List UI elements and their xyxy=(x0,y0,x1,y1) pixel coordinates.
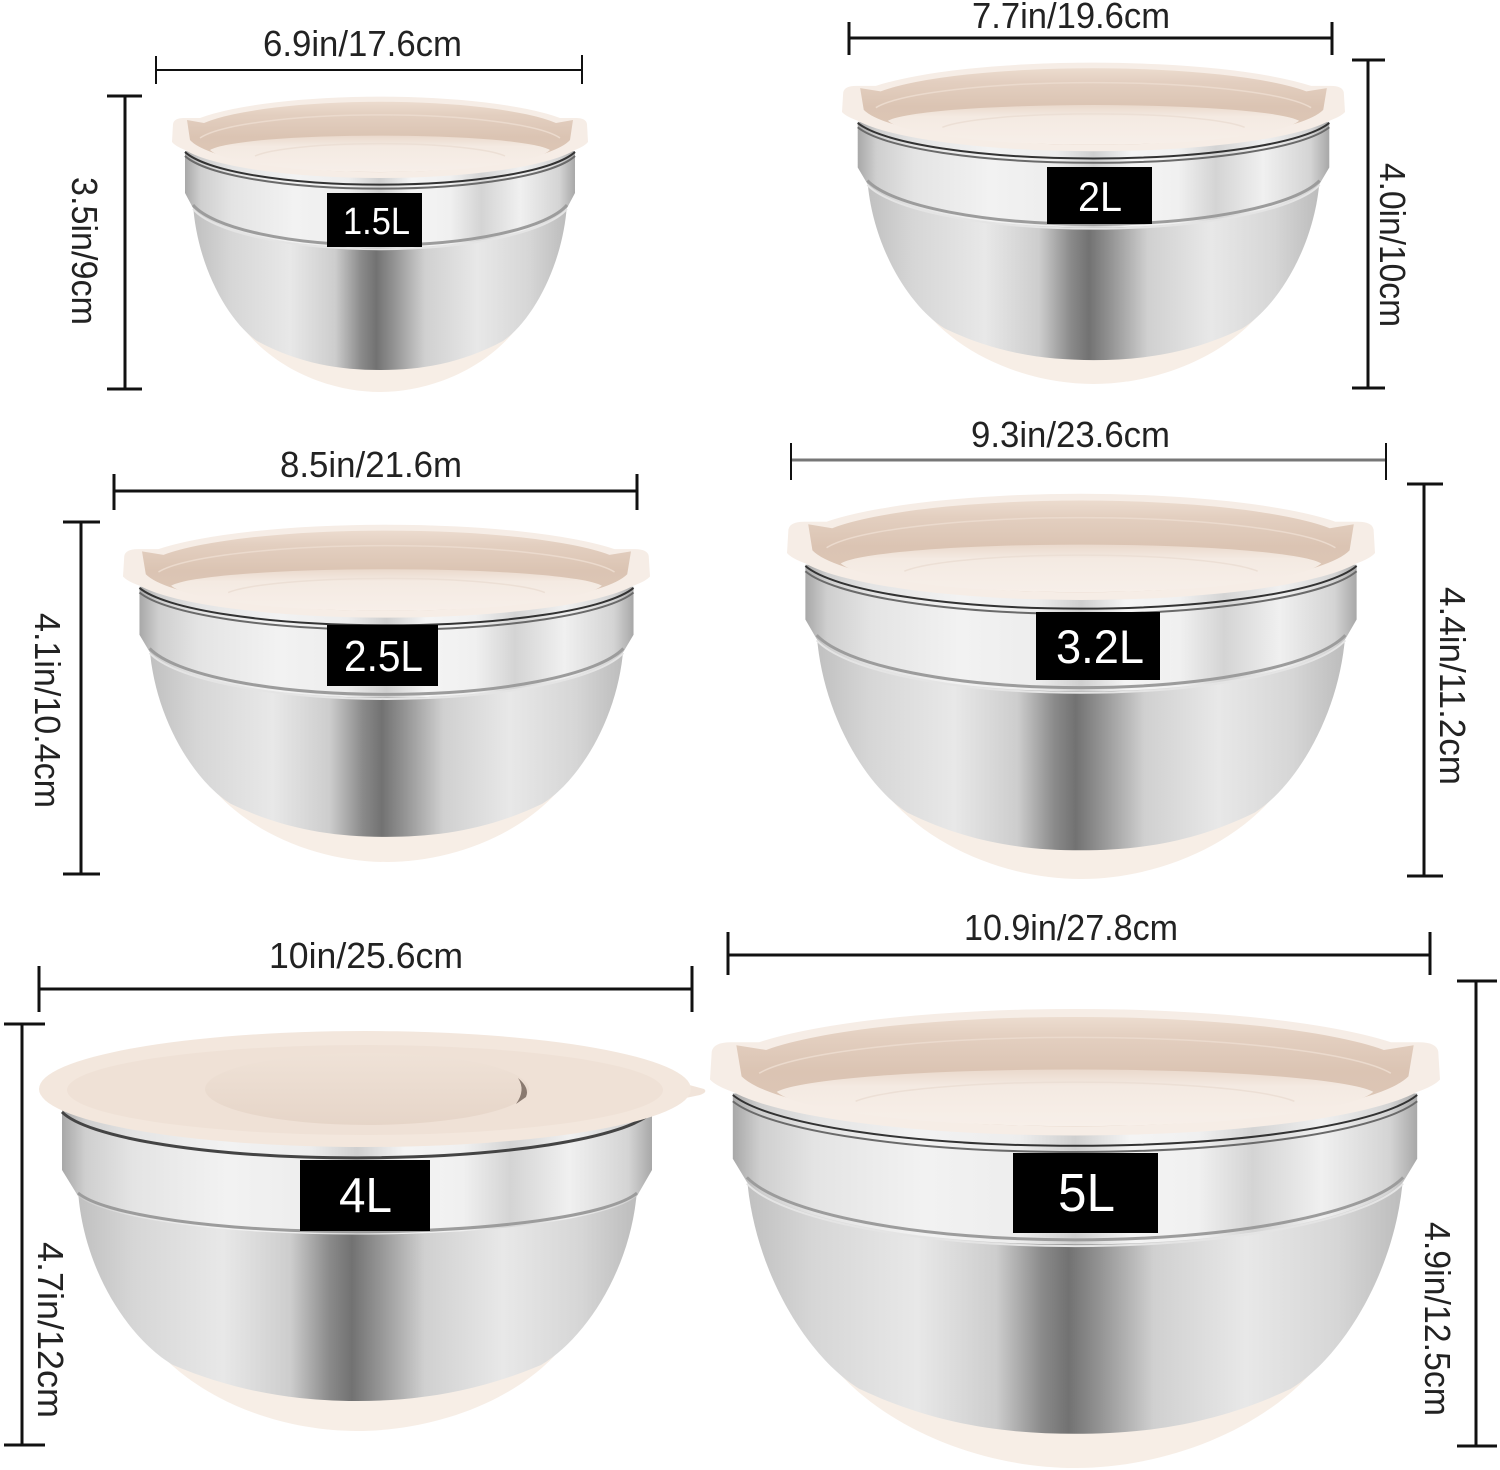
height dimension: 2L bowl: 4.0in/10cm xyxy=(1372,163,1413,327)
width dimension: 2L bowl xyxy=(849,0,1332,55)
capacity label: 2.5L xyxy=(327,625,438,686)
capacity label: 5L: 5L xyxy=(1058,1163,1115,1223)
bowl: 2.5L xyxy=(123,525,650,862)
bowl body and lid 2.5L xyxy=(123,525,650,862)
height dimension: 5L bowl: 4.9in/12.5cm xyxy=(1417,1222,1458,1416)
height dimension: 2L bowl xyxy=(1352,60,1413,388)
height dimension: 1.5L bowl xyxy=(64,96,142,389)
height dimension: 2.5L bowl: 4.1in/10.4cm xyxy=(27,613,68,808)
bowl body and lid 1.5L xyxy=(172,97,588,392)
bowl body and lid 3.2L xyxy=(787,494,1375,879)
capacity label: 2L xyxy=(1047,167,1152,224)
bowl: 5L xyxy=(710,1009,1440,1468)
capacity label: 2.5L: 2.5L xyxy=(344,632,423,681)
lid 4L xyxy=(39,1031,705,1147)
width dimension: 1.5L bowl: 6.9in/17.6cm xyxy=(263,23,462,64)
capacity label: 4L: 4L xyxy=(339,1169,392,1223)
silicone base 4L xyxy=(140,1330,575,1431)
bowl: 3.2L xyxy=(787,494,1375,879)
bowl: 2L xyxy=(842,63,1345,384)
width dimension: 3.2L bowl: 9.3in/23.6cm xyxy=(971,414,1170,455)
width dimension: 4L bowl xyxy=(39,935,692,1012)
lid knob xyxy=(205,1053,529,1125)
width dimension: 5L bowl: 10.9in/27.8cm xyxy=(964,907,1178,948)
width dimension: 2.5L bowl xyxy=(114,444,637,510)
bowl body and lid 2L xyxy=(842,63,1345,384)
height dimension: 5L bowl xyxy=(1417,981,1497,1446)
rim line 4L xyxy=(62,1112,652,1158)
capacity label: 1.5L xyxy=(327,193,422,247)
lower metal body 4L xyxy=(78,1190,637,1401)
capacity label: 5L xyxy=(1013,1153,1158,1233)
width dimension: 1.5L bowl xyxy=(156,23,582,84)
capacity label: 4L xyxy=(300,1160,430,1231)
height dimension: 3.2L bowl: 4.4in/11.2cm xyxy=(1432,587,1473,785)
height dimension: 2.5L bowl xyxy=(27,522,100,874)
height dimension: 3.2L bowl xyxy=(1407,484,1473,876)
capacity label: 3.2L: 3.2L xyxy=(1056,620,1144,673)
height dimension: 4L bowl xyxy=(4,1024,71,1445)
bowl: 4L xyxy=(39,1031,705,1431)
width dimension: 5L bowl xyxy=(728,907,1430,975)
width dimension: 2.5L bowl: 8.5in/21.6m xyxy=(280,444,462,485)
height dimension: 4L bowl: 4.7in/12cm xyxy=(30,1242,71,1418)
band groove 4L xyxy=(78,1193,637,1232)
bowl body and lid 5L xyxy=(710,1009,1440,1468)
width dimension: 4L bowl: 10in/25.6cm xyxy=(269,935,463,976)
capacity label: 2L: 2L xyxy=(1078,173,1122,220)
bowl: 1.5L xyxy=(172,97,588,392)
capacity label: 1.5L: 1.5L xyxy=(343,201,410,243)
width dimension: 3.2L bowl xyxy=(791,414,1386,480)
capacity label: 3.2L xyxy=(1036,612,1160,680)
metal band 4L xyxy=(62,1100,652,1235)
height dimension: 1.5L bowl: 3.5in/9cm xyxy=(64,177,105,325)
